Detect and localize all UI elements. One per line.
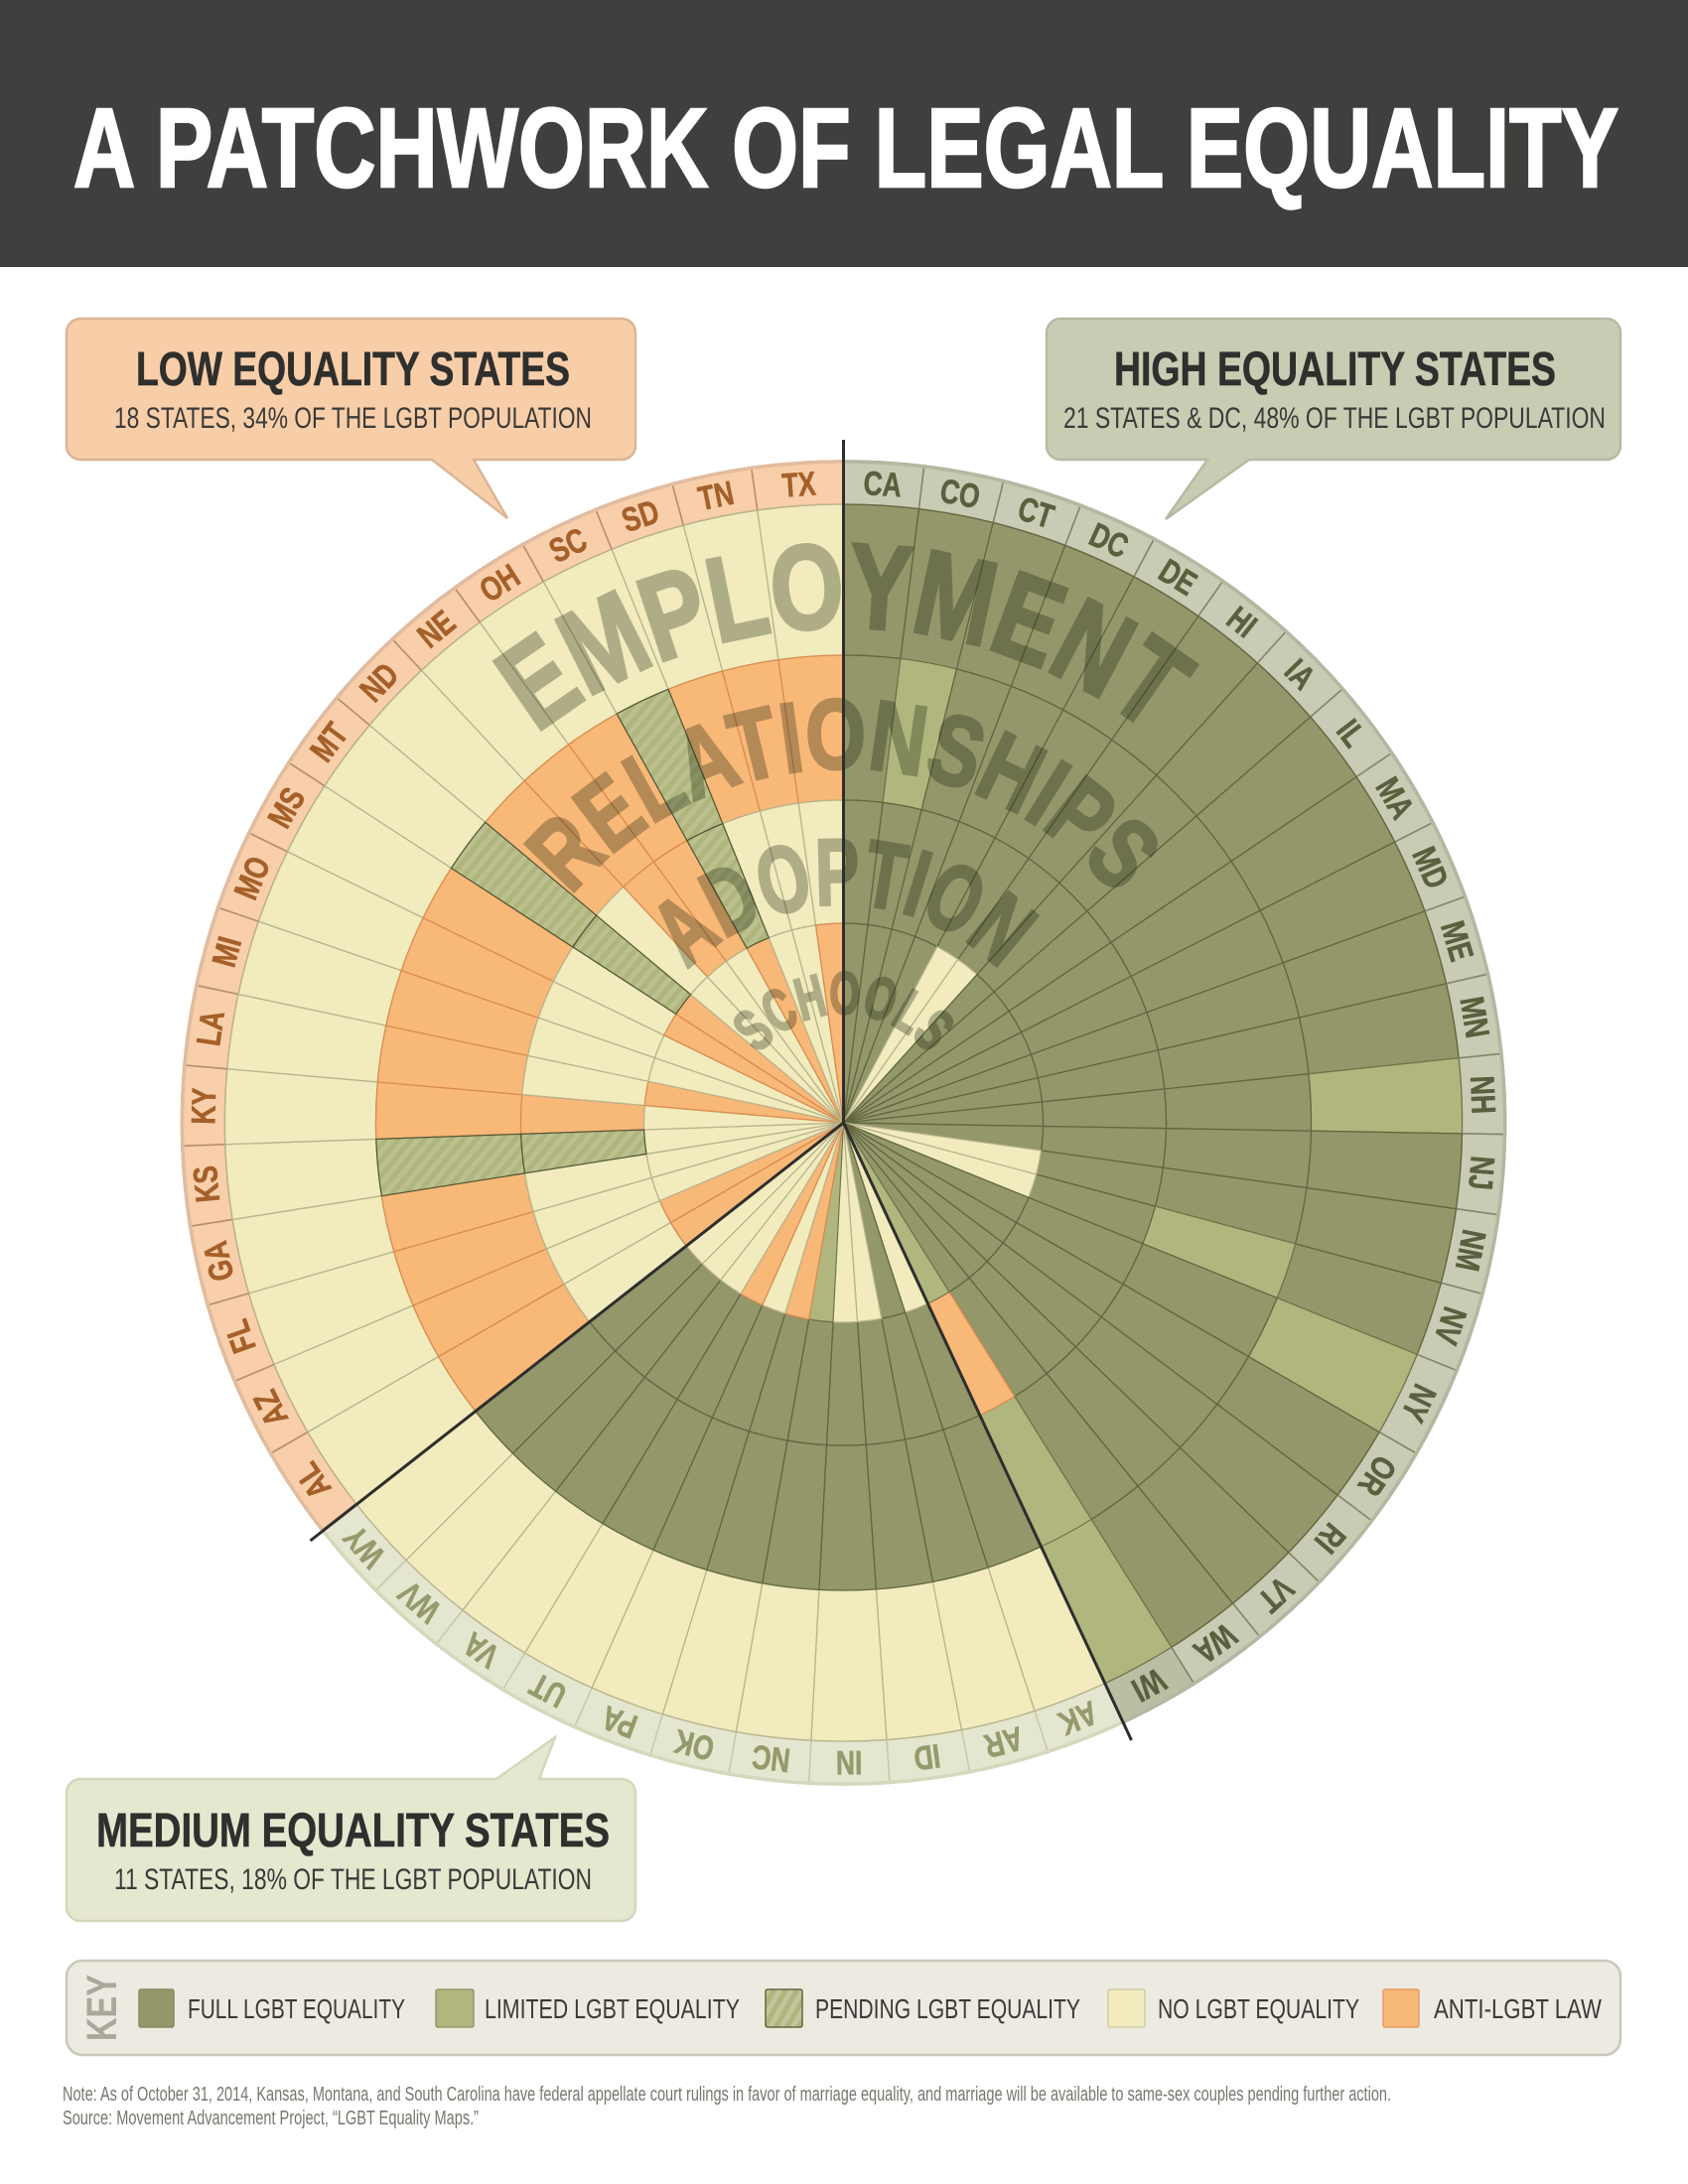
- state wedge: WV: WV: [391, 1573, 448, 1630]
- state wedge: LA: LA: [190, 1009, 232, 1048]
- state wedge: MO: MO: [227, 852, 278, 904]
- legend item: limited: [436, 1989, 740, 2027]
- callout: medium equality states: 11 STATES, 18% OF THE LGBT POPULATION: [114, 1863, 592, 1896]
- legend item: full: FULL LGBT EQUALITY: [188, 1993, 405, 2024]
- state wedge: IN: IN: [836, 1743, 863, 1781]
- state wedge: NC: [728, 1119, 844, 1784]
- state wedge: IA: IA: [1277, 652, 1323, 697]
- state wedge: UT: UT: [523, 1665, 572, 1714]
- state wedge: AZ: AZ: [246, 1384, 296, 1433]
- callout: medium equality states: MEDIUM EQUALITY STATES: [96, 1805, 610, 1857]
- legend item: none: NO LGBT EQUALITY: [1158, 1993, 1359, 2024]
- state wedge: MN: [844, 974, 1507, 1201]
- state wedge: AR: AR: [980, 1718, 1027, 1765]
- state wedge: NJ: NJ: [1461, 1155, 1501, 1191]
- state wedge: KY: KY: [185, 1087, 223, 1125]
- domain label: RELATIONSHIPS: RELATIONSHIPS: [522, 697, 1158, 893]
- state wedge: CT: CT: [1014, 489, 1058, 536]
- legend item: anti: ANTI-LGBT LAW: [1434, 1993, 1602, 2024]
- state wedge: MD: MD: [1405, 842, 1456, 894]
- callout: low equality states: LOW EQUALITY STATES: [136, 343, 570, 396]
- state wedge: IL: IL: [1329, 713, 1373, 754]
- state wedge: NC: NC: [750, 1737, 792, 1779]
- state wedge: WY: WY: [337, 1518, 392, 1574]
- callout: high equality states: [1047, 319, 1620, 519]
- state wedge: ID: ID: [912, 1736, 942, 1777]
- state wedge: LA: [184, 985, 851, 1123]
- state wedge: IL: [844, 688, 1396, 1183]
- state wedge: IA: [844, 630, 1346, 1176]
- footnote and source: Source: Movement Advancement Project, “LGBT Equality Maps.”: [63, 2108, 479, 2129]
- state wedge: NE: NE: [410, 604, 463, 655]
- state wedge: AL: AL: [288, 1455, 339, 1505]
- state wedge: NY: [809, 1123, 1458, 1456]
- state wedge: CO: CO: [937, 472, 983, 516]
- state wedge: WV: [372, 1073, 844, 1645]
- pending equality cells: KS, MT, SC: [372, 686, 797, 1196]
- state wedge: DE: [844, 538, 1225, 1160]
- state wedge: ME: [844, 896, 1493, 1198]
- state wedge: KS: [177, 1043, 844, 1226]
- state wedge: TX: TX: [780, 465, 817, 505]
- state wedge: ND: ND: [352, 656, 406, 710]
- group dividers: [310, 440, 1132, 1740]
- state wedge: MS: MS: [261, 781, 313, 834]
- state wedge: PA: [573, 1099, 844, 1756]
- state wedge: FL: [203, 1048, 844, 1382]
- state wedge: WA: [780, 1123, 1260, 1689]
- state wedge: VT: VT: [1250, 1569, 1301, 1620]
- state wedge: OH: OH: [473, 557, 526, 610]
- legend item: limited: LIMITED LGBT EQUALITY: [485, 1993, 740, 2024]
- state wedge: NH: [844, 1053, 1510, 1203]
- state wedge: GA: [185, 1045, 844, 1305]
- state wedge: CT: [844, 480, 1082, 1143]
- legend item: anti: [1383, 1989, 1602, 2027]
- state wedge: TN: TN: [695, 475, 737, 518]
- state wedge: DC: DC: [1083, 516, 1134, 566]
- legend item: pending: [766, 1989, 1080, 2027]
- state wedge: AZ: [229, 1053, 844, 1453]
- state wedge: HI: HI: [1219, 600, 1264, 645]
- callout: high equality states: HIGH EQUALITY STATES: [1114, 343, 1556, 396]
- state wedge: ND: [337, 635, 896, 1123]
- state wedge: UT: [500, 1090, 844, 1727]
- radial chart: states by equality domain: [181, 440, 1507, 1786]
- state wedge: CO: [844, 466, 1004, 1133]
- callout: low equality states: [67, 319, 635, 518]
- state wedge: VA: [433, 1081, 844, 1691]
- state wedge: VA: VA: [457, 1624, 506, 1675]
- state wedge: MA: MA: [1368, 771, 1421, 825]
- domain label: EMPLOYMENT: EMPLOYMENT: [492, 542, 1199, 732]
- state wedge: OK: [649, 1109, 844, 1775]
- state wedge: WY: [318, 1066, 844, 1591]
- state wedge: SD: [596, 478, 918, 1123]
- callout: low equality states: 18 STATES, 34% OF THE LGBT POPULATION: [114, 402, 592, 435]
- legend item: none: [1108, 1989, 1359, 2027]
- footnote and source: [63, 2084, 1391, 2129]
- state wedge: KY: [179, 1042, 844, 1146]
- legend panel: [67, 1961, 1620, 2055]
- state wedge: NE: [392, 584, 903, 1123]
- state wedge: ME: ME: [1433, 917, 1480, 966]
- state wedge: WI: WI: [1126, 1661, 1172, 1708]
- state wedge: FL: FL: [217, 1314, 264, 1358]
- state wedge: NV: [822, 1123, 1483, 1372]
- state wedge: TX: [752, 455, 934, 1123]
- state wedge: TN: [672, 463, 921, 1123]
- state wedge: DC: [844, 504, 1156, 1152]
- state wedge: WA: WA: [1187, 1616, 1243, 1671]
- state wedge: MA: [844, 752, 1438, 1189]
- state wedge: WI: [775, 1123, 1195, 1727]
- state wedge: NM: [832, 1123, 1499, 1295]
- state wedge: RI: [795, 1123, 1372, 1585]
- legend item: pending: PENDING LGBT EQUALITY: [815, 1993, 1080, 2024]
- state wedge: IN: [763, 1123, 890, 1789]
- state wedge: PA: PA: [597, 1698, 642, 1745]
- callout: medium equality states: [67, 1737, 635, 1921]
- domain label: SCHOOLS: SCHOOLS: [733, 971, 953, 1050]
- legend heading: KEY: KEY: [78, 1975, 126, 2041]
- state wedge: OH: [454, 540, 909, 1123]
- state wedge: GA: GA: [197, 1238, 241, 1285]
- state wedge: CA: [844, 461, 924, 1123]
- state wedge: NV: NV: [1426, 1302, 1474, 1349]
- state wedge: NH: NH: [1463, 1075, 1502, 1115]
- state wedge: AK: AK: [1054, 1694, 1102, 1742]
- state wedge: CA: CA: [863, 465, 903, 504]
- state wedge: NJ: [842, 1123, 1505, 1215]
- state wedge: SC: SC: [543, 521, 593, 571]
- domain label: ADOPTION: ADOPTION: [657, 838, 1041, 970]
- state wedge: SD: SD: [618, 492, 664, 540]
- state wedge: MI: [196, 906, 860, 1123]
- state wedge: MT: [288, 695, 888, 1123]
- state wedge: MS: [248, 760, 879, 1123]
- state wedge: AR: [767, 1123, 1049, 1777]
- state wedge: RI: RI: [1307, 1516, 1352, 1561]
- state wedge: HI: [844, 581, 1290, 1169]
- state wedge: MN: MN: [1453, 994, 1496, 1040]
- state wedge: MI: MI: [206, 933, 249, 971]
- legend item: full: [139, 1989, 405, 2027]
- state wedge: MD: [844, 822, 1471, 1194]
- state wedge: MT: MT: [303, 716, 356, 769]
- state wedge: ID: [765, 1123, 970, 1788]
- state wedge: NY: NY: [1393, 1379, 1444, 1428]
- outer rim: [183, 462, 1505, 1784]
- state wedge: SC: [522, 504, 914, 1123]
- header banner: [0, 0, 1688, 267]
- state wedge: OR: OR: [1350, 1448, 1403, 1503]
- state wedge: AL: [265, 1050, 844, 1531]
- state wedge: DE: DE: [1152, 552, 1203, 604]
- state wedge: AK: [771, 1123, 1123, 1757]
- state wedge: VT: [787, 1123, 1320, 1641]
- state wedge: OK: OK: [670, 1721, 718, 1767]
- state wedge: MO: [217, 831, 870, 1123]
- state wedge: NM: NM: [1448, 1226, 1492, 1274]
- state wedge: OR: [803, 1123, 1417, 1524]
- state wedge: KS: KS: [187, 1164, 227, 1204]
